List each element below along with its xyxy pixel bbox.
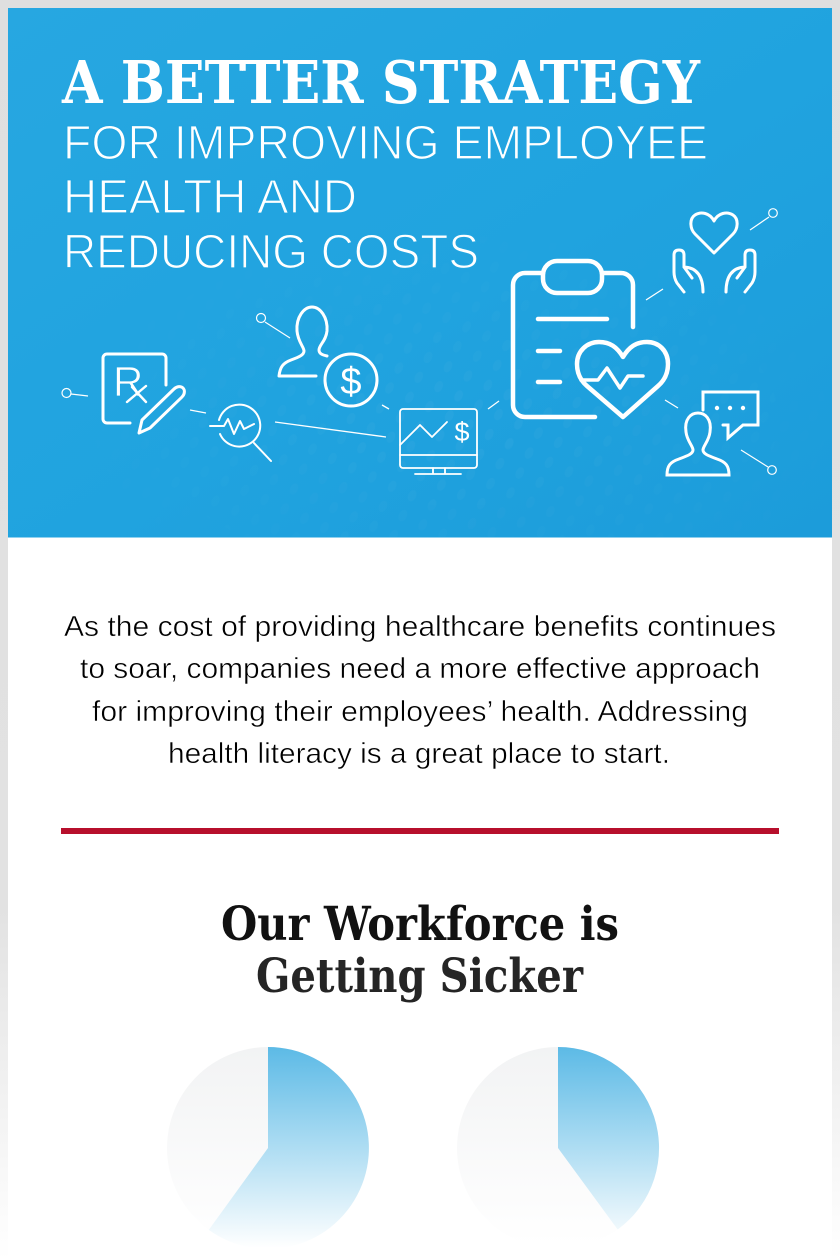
title: A Better Strategy: A BETTER STRATEGY — [61, 48, 701, 117]
pie chart: right — [457, 1047, 659, 1249]
subtitle: FOR IMPROVING EMPLOYEE — [63, 117, 708, 170]
icon: prescription pad — [103, 354, 184, 433]
subtitle — [63, 117, 708, 279]
intro paragraph: As the cost of providing healthcare benefits continues — [64, 611, 776, 643]
connector: pad to magnifier — [190, 410, 206, 413]
connector: clipboard to person — [665, 400, 678, 408]
red divider — [61, 828, 779, 834]
connector: far left node — [62, 388, 88, 398]
icon: monitor with chart: $ — [454, 417, 470, 447]
connector: coin to monitor — [382, 405, 389, 409]
icon: monitor with chart — [400, 409, 477, 474]
intro paragraph: for improving their employees’ health. Addressing — [92, 696, 748, 728]
connector: hands node — [750, 209, 777, 230]
connector: clipboard to hands — [646, 289, 663, 300]
intro paragraph — [64, 611, 776, 770]
icon: person with dollar coin — [279, 307, 377, 406]
intro paragraph: health literacy is a great place to start. — [168, 738, 670, 770]
connector: monitor to clipboard — [488, 401, 499, 409]
icon: person with speech bubble — [667, 392, 758, 475]
heading: our workforce is getting sicker: Our Workforce is — [221, 897, 619, 952]
connector: person node — [256, 314, 290, 338]
white content panel — [8, 537, 832, 1260]
subtitle: REDUCING COSTS — [63, 226, 479, 279]
intro paragraph: to soar, companies need a more effective approach — [80, 653, 760, 685]
icon: hands holding heart — [674, 213, 755, 292]
connector: magnifier to monitor — [275, 422, 386, 437]
heading: our workforce is getting sicker: Getting Sicker — [256, 949, 584, 1004]
icon: clipboard with heart — [513, 261, 668, 417]
subtitle: HEALTH AND — [63, 171, 357, 224]
connector: person node — [741, 450, 776, 474]
heading: our workforce is getting sicker — [221, 897, 619, 1004]
icon: prescription pad: R — [113, 358, 143, 405]
panel: blue header — [8, 8, 832, 538]
pie chart: left — [167, 1047, 369, 1249]
icon: person with dollar coin: $ — [340, 361, 362, 403]
icon: magnifier with pulse — [210, 405, 271, 461]
